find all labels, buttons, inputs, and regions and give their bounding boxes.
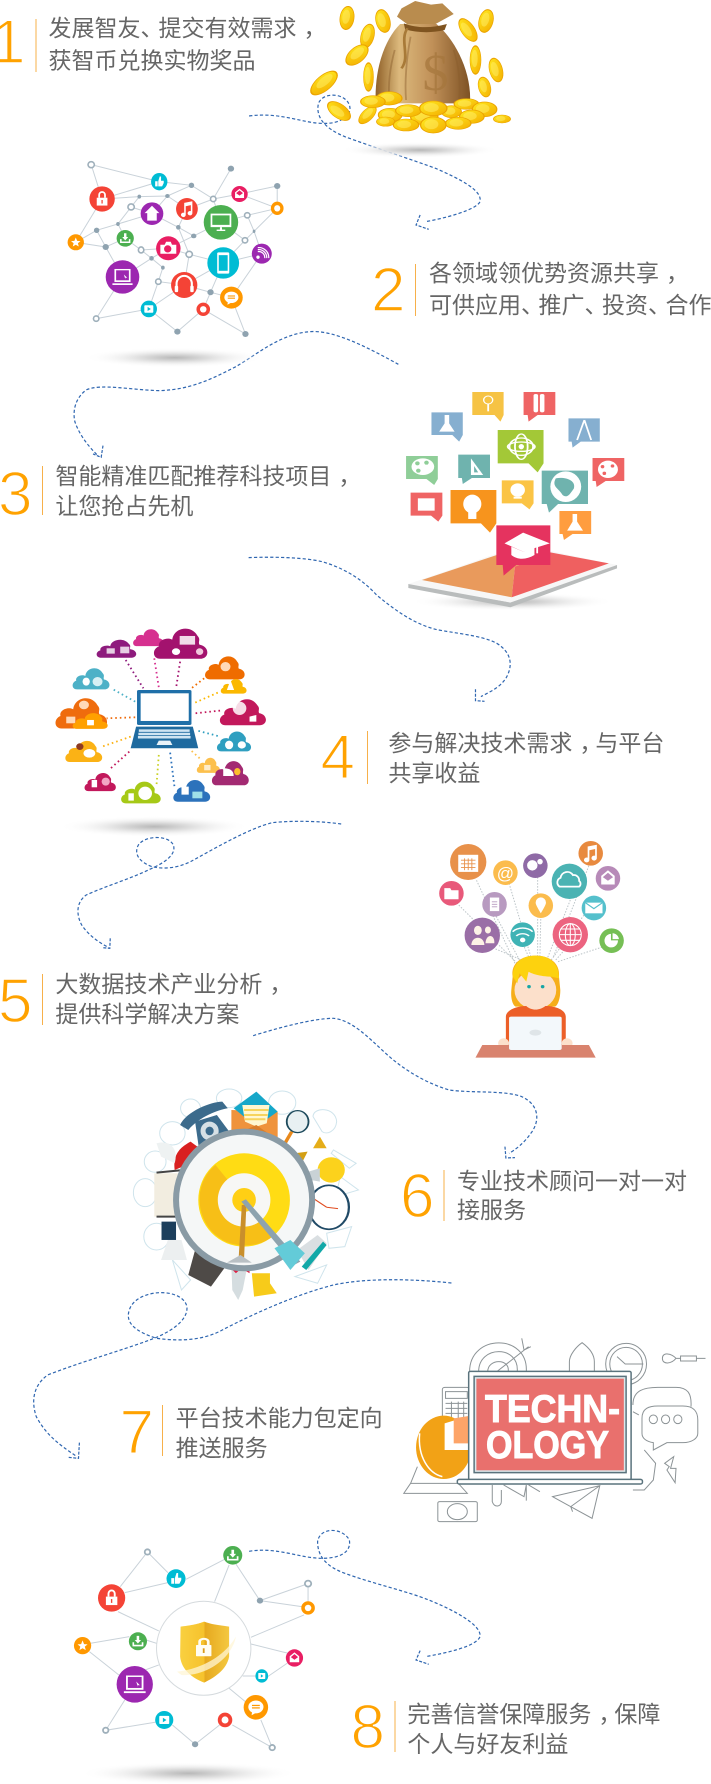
step 8 text: 个人与好友利益 — [407, 1731, 568, 1757]
step 2 text: 可供应用、推广、投资、合作 — [429, 292, 711, 318]
dashed route 4 — [78, 821, 341, 948]
screen title — [485, 1388, 620, 1467]
number 7: 7 — [120, 1398, 154, 1467]
step 3 text: 让您抢占先机 — [55, 493, 193, 519]
number 6: 6 — [400, 1162, 434, 1231]
screen title: TECHN- — [485, 1388, 620, 1431]
illustration: money bag with coins — [307, 1, 510, 158]
step 5 text — [0, 967, 292, 1036]
step 4 text: 共享收益 — [388, 760, 480, 786]
divider — [367, 731, 368, 784]
divider — [415, 264, 416, 316]
illustration: money bag with coins: $ — [422, 45, 448, 102]
dashed route 2 — [74, 332, 398, 457]
illustration: icon network — [68, 162, 284, 368]
step 8 text — [350, 1693, 660, 1762]
illustration: cloud services around laptop — [56, 629, 266, 837]
step 6 text — [400, 1162, 687, 1231]
description: 完善信誉保障服务 ，保障 — [407, 1701, 660, 1727]
illustration: technology laptop — [404, 1338, 706, 1522]
description: 大数据技术产业分析 ， — [55, 971, 292, 997]
divider — [162, 1405, 163, 1456]
number 8: 8 — [350, 1693, 385, 1762]
step 3 text — [0, 460, 361, 529]
icon: at sign: @ — [497, 864, 514, 883]
number 4: 4 — [320, 723, 355, 792]
number 2: 2 — [371, 256, 405, 325]
description: 智能精准匹配推荐科技项目 ， — [55, 463, 361, 489]
step 2 text — [371, 256, 711, 325]
step 1 text — [0, 8, 326, 77]
dashed route 3 — [249, 557, 510, 701]
illustration: target with office objects — [133, 1089, 358, 1300]
description: 发展智友、提交有效需求 ， — [48, 15, 326, 41]
description: 参与解决技术需求 ，与平台 — [388, 730, 664, 756]
dashed route 5 — [253, 1018, 537, 1158]
illustration: science bubbles on tablet — [406, 392, 624, 611]
description: 专业技术顾问一对一对 — [457, 1168, 687, 1194]
divider — [394, 1701, 396, 1752]
step 1 text: 获智币兑换实物奖品 — [48, 48, 256, 74]
dashed route 1 — [249, 95, 480, 229]
divider — [42, 974, 43, 1025]
illustration: security shield network — [74, 1546, 315, 1784]
divider — [444, 1170, 445, 1221]
screen title: OLOGY — [486, 1424, 609, 1467]
divider — [36, 19, 37, 72]
divider — [42, 466, 43, 515]
step 7 text: 推送服务 — [176, 1435, 268, 1461]
description: 各领域领优势资源共享 ， — [429, 260, 689, 286]
dashed route 7 — [249, 1530, 480, 1664]
description: 平台技术能力包定向 — [176, 1405, 383, 1431]
illustration: person with laptop and idea bubbles — [439, 841, 624, 1058]
step 7 text — [120, 1398, 383, 1467]
step 4 text — [320, 723, 664, 792]
step 5 text: 提供科学解决方案 — [55, 1001, 239, 1027]
dashed route 6 — [34, 1280, 451, 1458]
step 6 text: 接服务 — [457, 1197, 526, 1223]
